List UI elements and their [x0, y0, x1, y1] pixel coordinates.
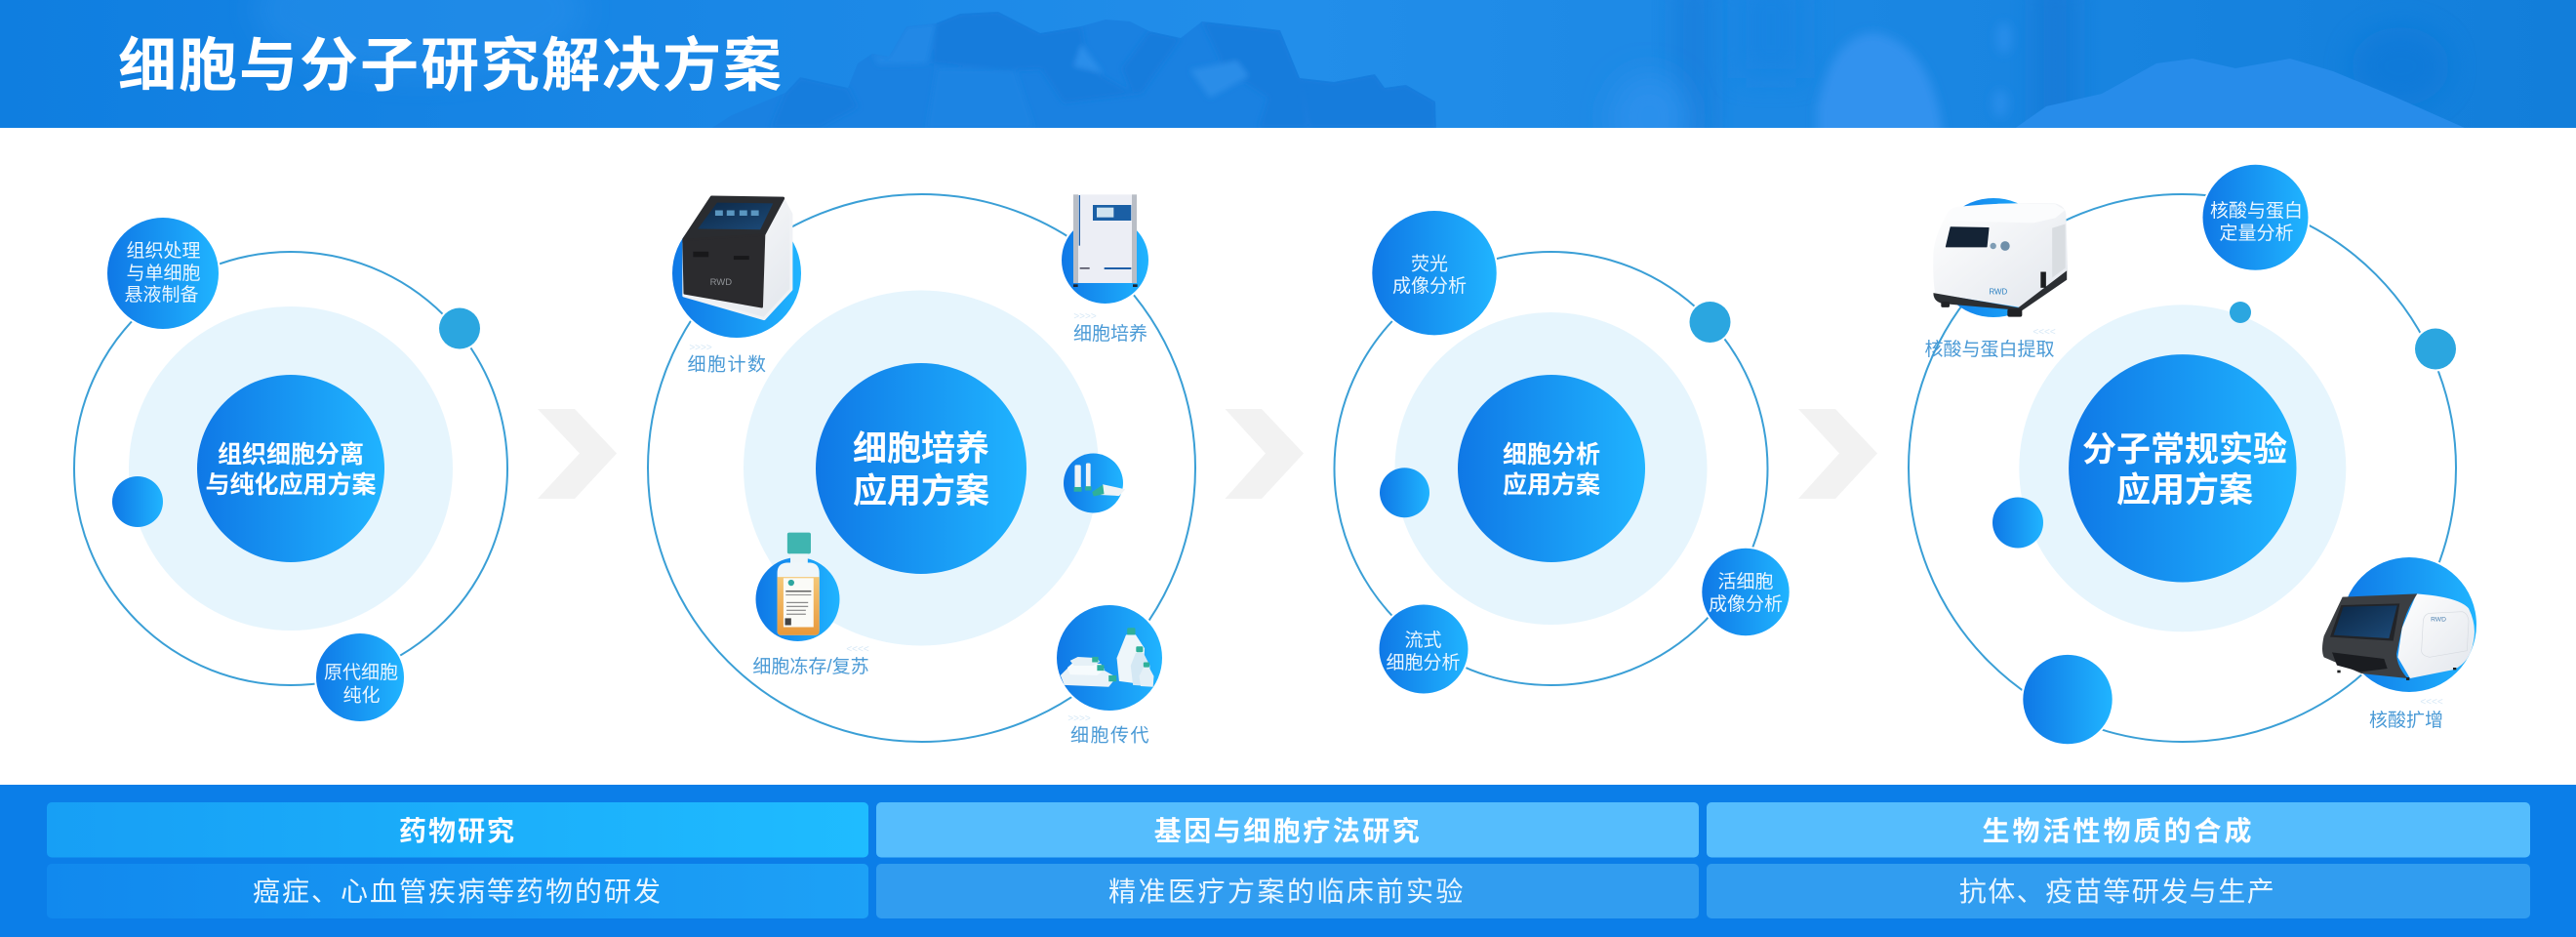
center circle: 组织细胞分离	[218, 441, 364, 468]
dot: left	[1992, 498, 2043, 549]
satellite: live cell imaging: 成像分析	[1709, 593, 1783, 615]
label: cryopreservation and recovery: <<<<	[846, 644, 869, 655]
center circle	[197, 375, 384, 562]
satellite: cell counter: RWD	[710, 277, 732, 288]
satellite: primary cell purification	[316, 633, 404, 721]
satellite: tissue processing: 组织处理	[126, 240, 201, 262]
label: cell passaging: >>>>	[1067, 713, 1091, 724]
center circle: 分子常规实验	[2082, 431, 2287, 468]
label: nucleic acid and protein extraction	[1924, 327, 2056, 360]
dot: bottom	[2023, 655, 2113, 744]
center circle: 应用方案	[853, 472, 989, 510]
title: 细胞与分子研究解决方案	[118, 33, 784, 99]
dot: small upper	[2230, 302, 2251, 323]
center circle	[1458, 375, 1645, 562]
column: drug research: 癌症、心血管疾病等药物的研发	[253, 876, 663, 907]
satellite: tubes and flask	[1064, 453, 1125, 513]
label: cell culture	[1073, 311, 1147, 345]
center circle: 应用方案	[2116, 471, 2253, 509]
label: nucleic acid and protein extraction: 核酸与蛋白提取	[1924, 339, 2055, 360]
center circle	[816, 363, 1026, 574]
satellite: fluorescence imaging	[1372, 211, 1497, 335]
satellite: tissue processing	[107, 218, 219, 329]
label: cell culture: >>>>	[1073, 311, 1097, 322]
center circle: 细胞培养	[853, 429, 989, 468]
column: drug research: 药物研究	[399, 816, 516, 846]
satellite: flow cytometry: 流式	[1404, 630, 1442, 651]
satellite: primary cell purification: 原代细胞	[324, 662, 398, 683]
label: nucleic acid and protein extraction: <<<<	[2033, 327, 2056, 338]
center circle	[2069, 354, 2297, 582]
label: cell passaging: 细胞传代	[1070, 724, 1150, 746]
chevron arrow 3	[1798, 409, 1877, 499]
dot: left	[112, 476, 163, 527]
satellite: live cell imaging	[1702, 549, 1790, 635]
satellite: nucleic acid and protein quantification	[2203, 165, 2309, 270]
chevron arrow 1	[538, 409, 617, 499]
satellite: PCR instrument	[2322, 557, 2476, 692]
satellite: cell counter	[672, 197, 801, 338]
satellite: culture flasks	[1057, 605, 1162, 711]
column: bioactive synthesis: 生物活性物质的合成	[1982, 816, 2255, 846]
satellite: nucleic acid and protein quantification: 核酸与蛋白	[2210, 200, 2303, 222]
column: bioactive synthesis: 抗体、疫苗等研发与生产	[1959, 876, 2275, 907]
chevron arrow 2	[1226, 409, 1304, 499]
column: bioactive synthesis	[1707, 802, 2530, 918]
satellite: fluorescence imaging: 荧光	[1411, 254, 1448, 275]
satellite: centrifuge: RWD	[1989, 287, 2007, 296]
satellite: tissue processing: 悬液制备	[124, 284, 199, 306]
label: cell counting	[687, 343, 768, 375]
panel: cell culture	[648, 194, 1195, 746]
header band	[0, 0, 2576, 128]
label: cell passaging	[1067, 713, 1150, 746]
satellite: cryopreservation bottle	[755, 533, 839, 641]
column: drug research	[47, 802, 868, 918]
dot: top right	[1690, 302, 1731, 343]
panel: molecular routine experiments	[1909, 165, 2476, 744]
label: cryopreservation and recovery	[752, 644, 869, 677]
satellite: live cell imaging: 活细胞	[1717, 571, 1774, 592]
column: gene and cell therapy: 精准医疗方案的临床前实验	[1108, 876, 1466, 907]
label: nucleic acid amplification: <<<<	[2420, 697, 2443, 708]
satellite: primary cell purification: 纯化	[342, 685, 381, 707]
dot: top right	[439, 308, 480, 349]
satellite: PCR instrument: RWD	[2431, 616, 2446, 623]
satellite: flow cytometry: 细胞分析	[1386, 652, 1461, 673]
panel: cell analysis	[1335, 211, 1790, 694]
satellite: centrifuge	[1933, 198, 2068, 317]
satellite: fluorescence imaging: 成像分析	[1392, 275, 1467, 297]
satellite: incubator	[1062, 194, 1148, 304]
label: nucleic acid amplification	[2369, 697, 2443, 731]
column: gene and cell therapy	[876, 802, 1699, 918]
label: nucleic acid amplification: 核酸扩增	[2369, 710, 2443, 731]
satellite: flow cytometry	[1380, 605, 1468, 693]
header background artwork	[254, 0, 2474, 161]
center circle: 细胞分析	[1503, 441, 1600, 468]
dot: left	[1380, 468, 1429, 517]
dot: right	[2415, 328, 2456, 369]
bottom band	[0, 785, 2576, 937]
label: cell counting: 细胞计数	[687, 353, 768, 375]
center circle: 应用方案	[1503, 470, 1600, 499]
panel: tissue cell separation	[74, 218, 507, 721]
satellite: nucleic acid and protein quantification: 定量分析	[2219, 223, 2294, 244]
label: cell culture: 细胞培养	[1073, 323, 1147, 345]
label: cell counting: >>>>	[689, 343, 712, 353]
satellite: tissue processing: 与单细胞	[126, 263, 201, 284]
center circle: 与纯化应用方案	[205, 470, 377, 499]
label: cryopreservation and recovery: 细胞冻存/复苏	[752, 656, 869, 677]
column: gene and cell therapy: 基因与细胞疗法研究	[1154, 816, 1422, 846]
